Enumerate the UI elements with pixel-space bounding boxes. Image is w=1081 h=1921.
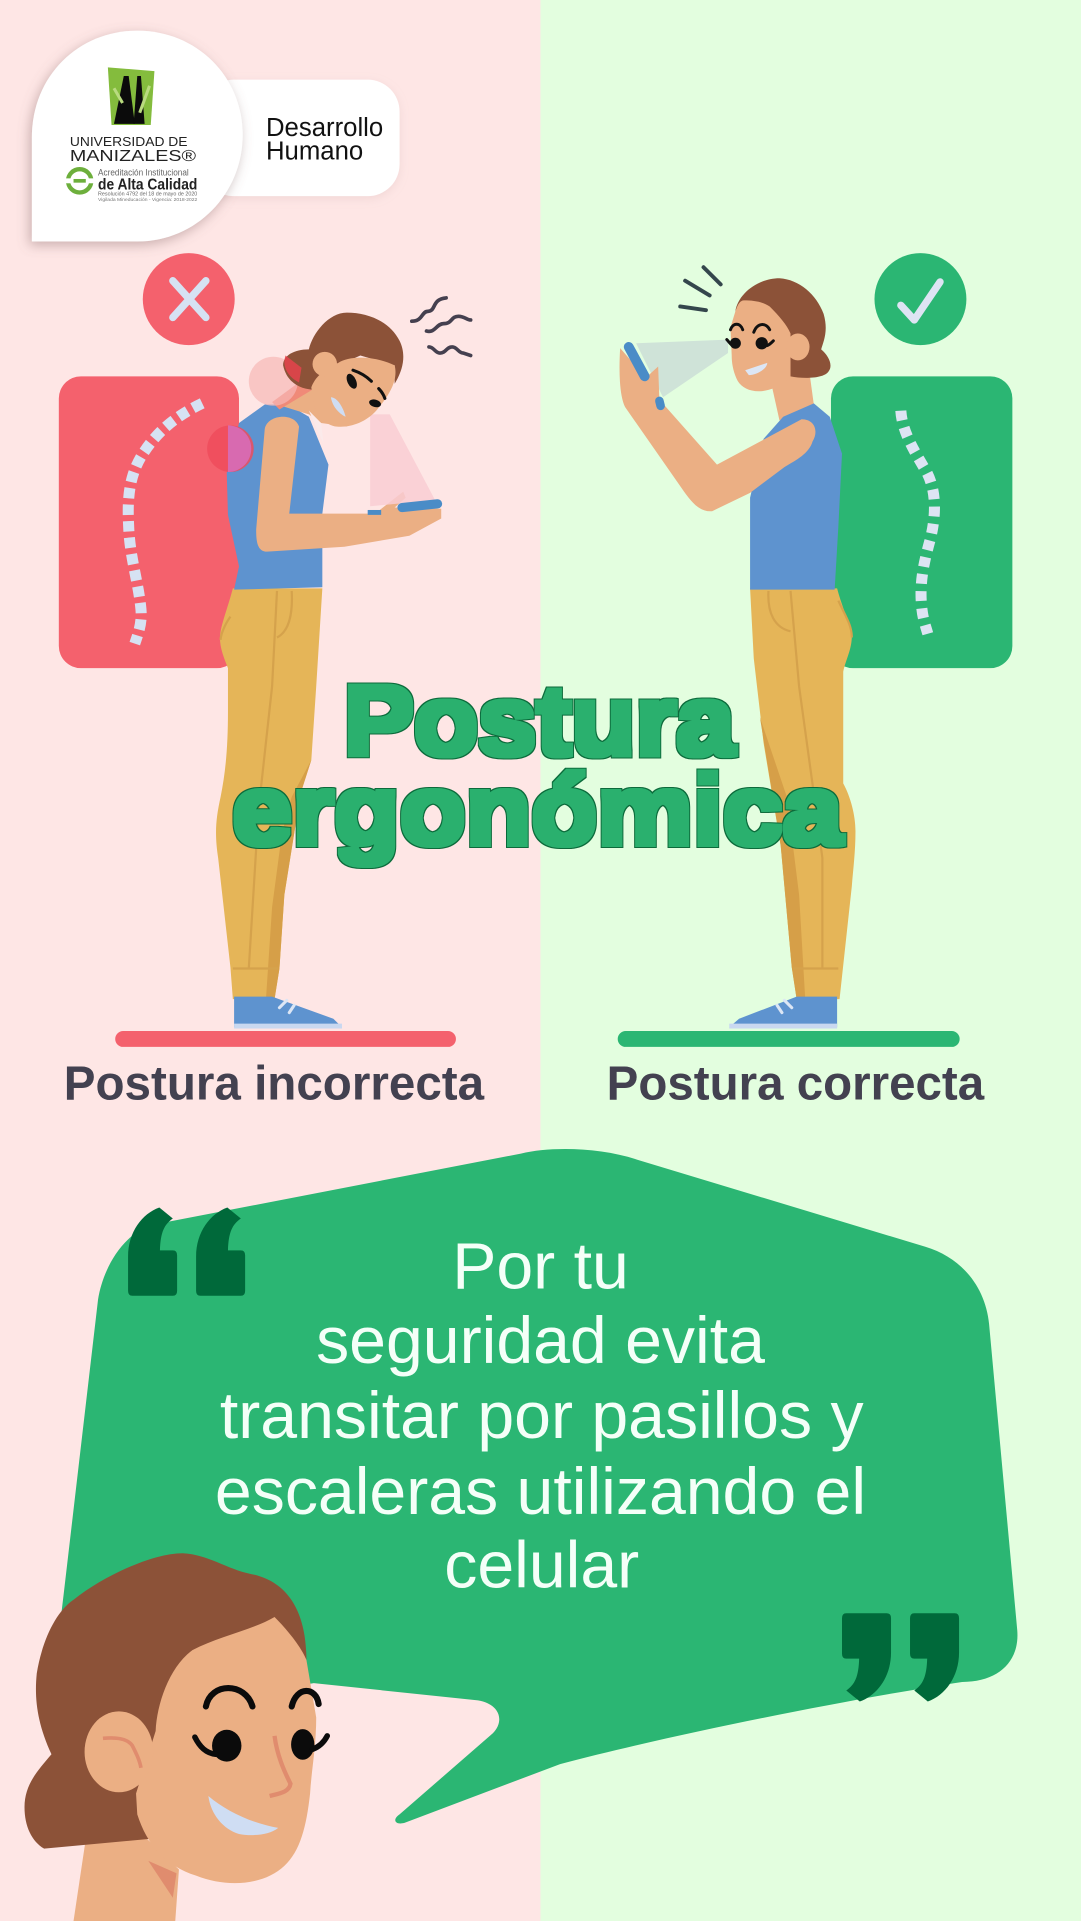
- phone: [629, 347, 645, 376]
- figure: incorrect posture: [207, 298, 471, 1029]
- message text: Por tu: [452, 1229, 629, 1303]
- light cone: [636, 340, 728, 397]
- neck: [772, 375, 814, 420]
- eyes: [353, 370, 385, 398]
- character head: [25, 1553, 327, 1921]
- neck: [277, 382, 347, 427]
- base bar: correct: [618, 1031, 960, 1047]
- smile: [745, 363, 767, 375]
- accreditation seal: Acreditación Institucional: [98, 167, 189, 177]
- university logo badge: [32, 31, 243, 242]
- face: [311, 358, 396, 427]
- teeth: [331, 397, 346, 417]
- title: [232, 666, 844, 865]
- back highlight: [207, 425, 254, 472]
- sparkle lines: [680, 267, 721, 310]
- background: incorrect side: [0, 0, 540, 1921]
- light cone: [370, 414, 435, 506]
- arm: [256, 417, 441, 552]
- accreditation seal: de Alta Calidad: [98, 176, 197, 193]
- accreditation seal: [65, 167, 198, 202]
- label pill: Desarrollo Humano: Humano: [266, 137, 363, 165]
- icon: check mark: [874, 253, 966, 345]
- opening quote: [128, 1208, 245, 1296]
- title: Postura: [344, 666, 736, 776]
- shoe: [234, 997, 342, 1027]
- shoe: [729, 997, 837, 1027]
- phone: [402, 504, 438, 508]
- figure: correct posture: [620, 267, 855, 1029]
- closing quote: [842, 1613, 959, 1702]
- smile: [208, 1796, 278, 1835]
- arm: [620, 348, 815, 511]
- accreditation seal: Vigilada Mineducación - Vigencia: 2018-2022: [98, 197, 198, 202]
- neck: [74, 1839, 179, 1921]
- message text: seguridad evita: [316, 1304, 765, 1378]
- icon: university emblem: [108, 67, 154, 125]
- background: correct side: [540, 0, 1081, 1921]
- nose: [270, 1736, 290, 1796]
- face: [136, 1617, 316, 1883]
- panel: bad spine: [59, 376, 239, 668]
- pants: [750, 588, 855, 999]
- university name: [70, 134, 196, 165]
- accreditation seal: Resolución 4792 del 18 de mayo de 2020: [98, 192, 197, 198]
- face: [730, 300, 791, 391]
- base bar: incorrect: [115, 1031, 456, 1047]
- brows: [206, 1688, 319, 1706]
- label pill: Desarrollo Humano: Desarrollo: [266, 114, 383, 142]
- message text: transitar por pasillos y: [220, 1379, 864, 1453]
- hair: [283, 313, 403, 390]
- label pill: Desarrollo Humano: [202, 80, 400, 196]
- label: correct posture: Postura correcta: [607, 1058, 985, 1111]
- label: incorrect posture: Postura incorrecta: [64, 1058, 485, 1111]
- hair: [735, 278, 830, 378]
- message text: [215, 1229, 866, 1603]
- pants: [216, 588, 322, 999]
- university name: MANIZALES®: [70, 148, 196, 165]
- stress squiggles: [412, 298, 471, 356]
- eyes and brows: [727, 324, 773, 346]
- title: ergonómica: [232, 755, 844, 865]
- ear: [85, 1711, 153, 1792]
- eyes: [195, 1729, 327, 1762]
- message text: escaleras utilizando el: [215, 1455, 866, 1529]
- neck scarf highlight: [309, 411, 324, 444]
- hair: [25, 1553, 306, 1849]
- message text: celular: [444, 1529, 639, 1603]
- shirt: [750, 403, 842, 590]
- panel: good spine: [831, 376, 1012, 668]
- shirt: [227, 405, 328, 590]
- university name: UNIVERSIDAD DE: [70, 134, 188, 149]
- icon: X mark: [143, 253, 235, 345]
- speech bubble: [49, 1149, 1017, 1823]
